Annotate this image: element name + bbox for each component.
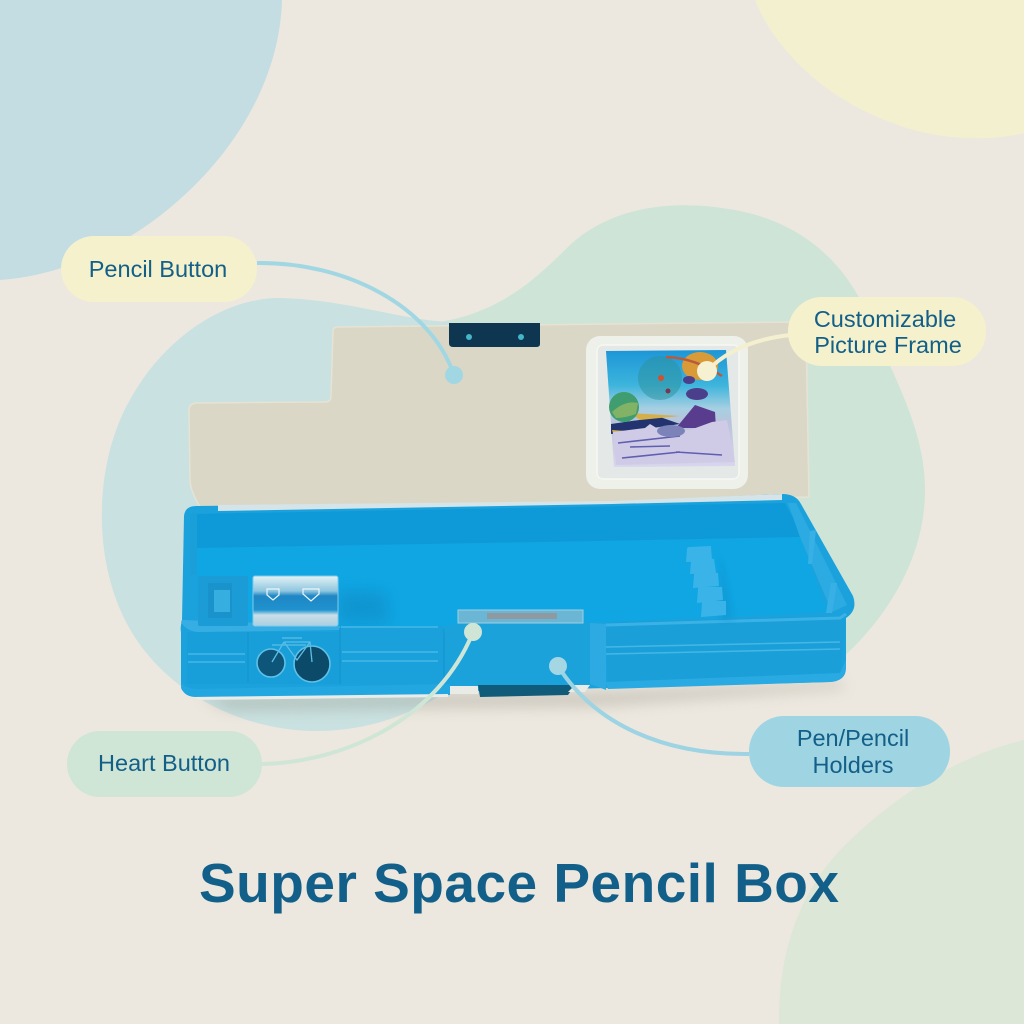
pencil button [198, 576, 248, 626]
label: customizable picture frame: Customizable [814, 306, 956, 332]
floor [197, 537, 828, 630]
customizable picture frame [586, 336, 748, 489]
floor shadow beside compartment [338, 590, 390, 624]
blob: centre green [440, 205, 925, 660]
holder tabs [686, 546, 733, 620]
connector: pencil button [257, 263, 463, 384]
white base edge [192, 694, 448, 700]
label: pencil button [61, 236, 257, 302]
back wall [190, 503, 804, 570]
connector: pen holders [549, 657, 749, 754]
label: customizable picture frame: Picture Frame [814, 332, 962, 358]
connector: heart button [262, 623, 482, 764]
right front wall [605, 614, 846, 689]
outer shell [181, 494, 854, 697]
right inner wall [788, 503, 847, 612]
front rim left [181, 620, 340, 632]
front left wall [187, 626, 444, 684]
bottom strap [450, 685, 590, 697]
side ribs [808, 530, 837, 613]
label: heart button: Heart Button [98, 750, 230, 776]
clear slit [458, 610, 583, 623]
bottom lip [181, 682, 450, 697]
label: heart button [67, 731, 262, 797]
label: pen pencil holders [749, 716, 950, 787]
blob: centre blue [102, 298, 450, 731]
label: pencil button: Pencil Button [89, 256, 227, 282]
blob: top right yellow [755, 0, 1024, 138]
blob: top left blue [0, 0, 282, 280]
label: customizable picture frame [788, 297, 986, 366]
blob: bottom right green [779, 740, 1024, 1024]
lid top clip [449, 323, 540, 347]
heart button [253, 576, 338, 626]
pencil box base [181, 494, 854, 710]
left inner wall [190, 514, 197, 575]
connector: picture frame [697, 335, 790, 381]
box shadow [200, 682, 846, 710]
lid seam [218, 494, 782, 511]
picture [606, 350, 735, 467]
title: Super Space Pencil Box [199, 852, 839, 914]
label: pen pencil holders: Holders [813, 752, 893, 778]
centre tab [444, 623, 605, 686]
bicycle lenses [257, 638, 330, 682]
label: pen pencil holders: Pen/Pencil [797, 725, 909, 751]
pencil box lid [189, 322, 809, 507]
